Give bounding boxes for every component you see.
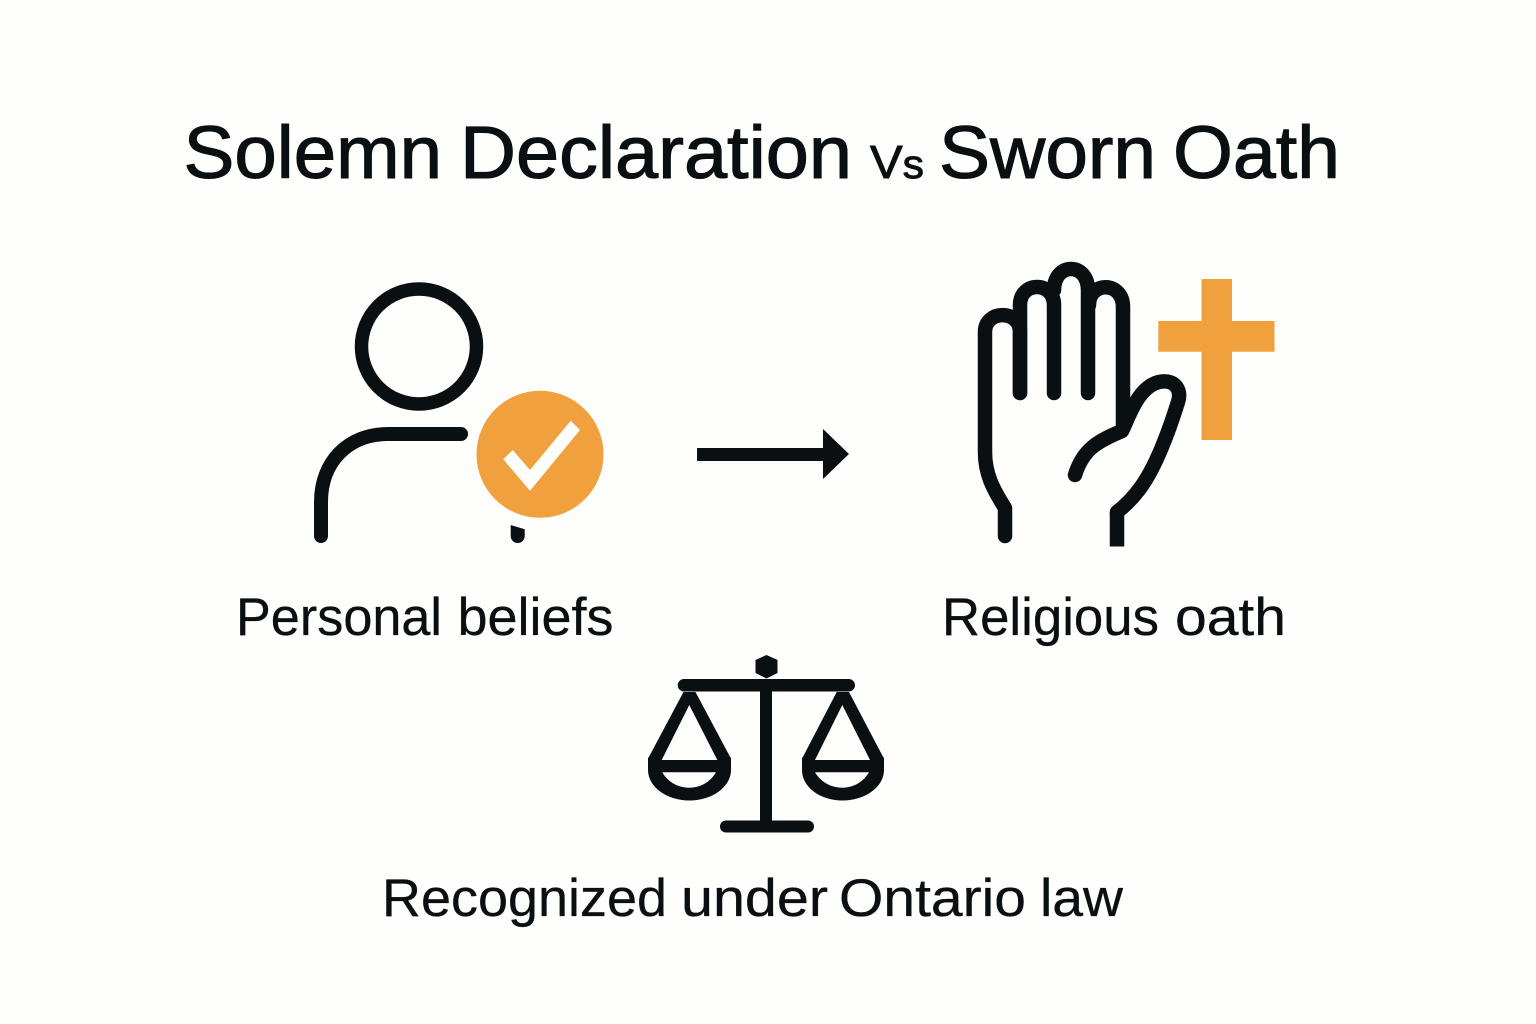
- label: religious oath: Religious: [942, 588, 1159, 647]
- label: recognized under Ontario law: law: [1040, 869, 1124, 928]
- icon: scales of justice: [648, 655, 884, 832]
- label: recognized under Ontario law: [382, 869, 1124, 928]
- label: religious oath: [942, 588, 1286, 647]
- label: religious oath: oath: [1175, 588, 1286, 647]
- title: Vs: [870, 136, 924, 188]
- label: recognized under Ontario law: Ontario: [839, 869, 1026, 928]
- arrow: [697, 429, 849, 479]
- label: recognized under Ontario law: under: [681, 869, 828, 928]
- label: personal beliefs: [236, 588, 614, 647]
- title: Solemn: [184, 111, 442, 194]
- icon: person with check badge: [321, 289, 604, 543]
- title: Declaration: [460, 111, 852, 194]
- title: [184, 111, 1340, 194]
- label: personal beliefs: beliefs: [458, 588, 614, 647]
- label: personal beliefs: Personal: [236, 588, 442, 647]
- label: recognized under Ontario law: Recognized: [382, 869, 667, 928]
- title: Sworn: [939, 111, 1156, 194]
- icon: raised hand with cross: [985, 269, 1274, 546]
- title: Oath: [1173, 111, 1340, 194]
